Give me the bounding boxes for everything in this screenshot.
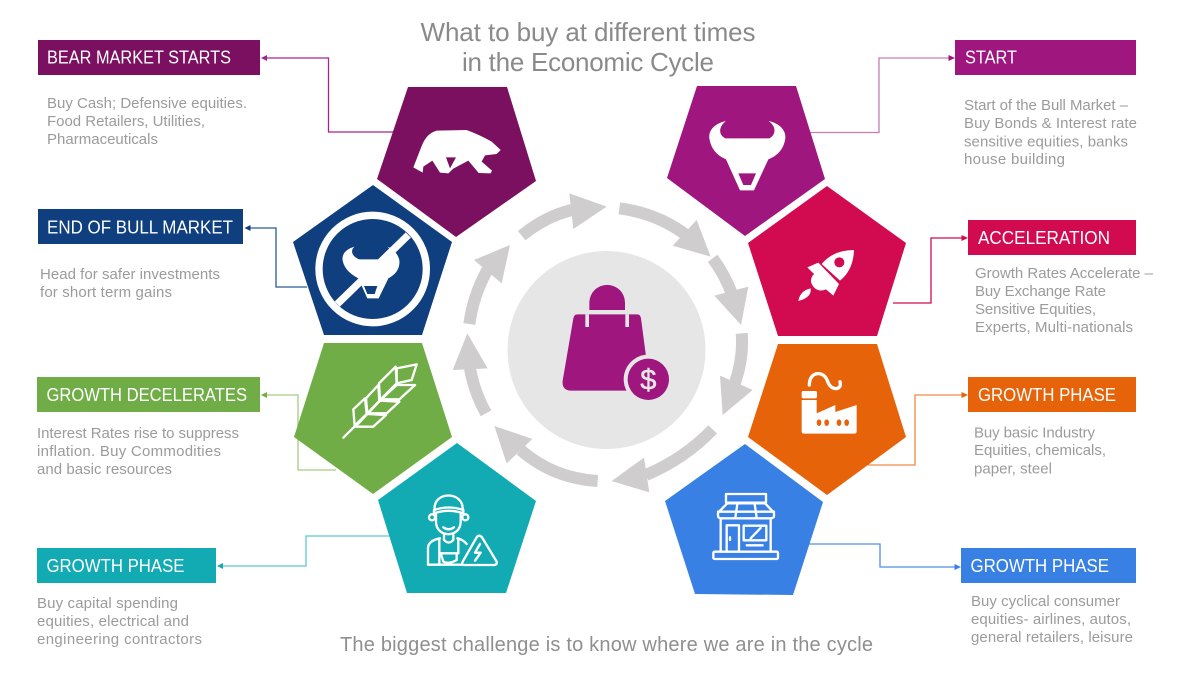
pentagon: bear market — [377, 87, 536, 237]
arrow 7 — [469, 245, 510, 324]
connector: start — [810, 55, 955, 132]
pentagon: growth decelerates — [294, 343, 452, 494]
heading — [968, 220, 1136, 255]
icon: crossed-out bull — [319, 215, 426, 323]
text block: Buy Bonds & Interest rate — [964, 115, 1137, 132]
heading: GROWTH PHASE — [978, 385, 1116, 405]
text block: Buy capital spending — [37, 595, 178, 612]
text block: Start of the Bull Market – — [964, 97, 1129, 114]
icon: store — [713, 494, 778, 559]
panel: growth phase teal — [37, 548, 216, 648]
text block: Head for safer investments — [40, 266, 220, 283]
connector: end of bull market — [244, 225, 307, 287]
text block — [40, 266, 220, 301]
text block: Growth Rates Accelerate – — [975, 265, 1154, 282]
heading: START — [965, 48, 1017, 68]
heading: GROWTH PHASE — [970, 556, 1109, 576]
title: What to buy at different times — [420, 17, 756, 47]
arrow 8 — [522, 193, 607, 236]
icon: shopping bag — [563, 285, 673, 404]
arrow 6 — [453, 333, 488, 413]
arrow 3 — [720, 333, 753, 415]
icon: factory — [802, 374, 857, 434]
pentagon: growth phase teal — [378, 443, 536, 593]
text block: for short term gains — [40, 284, 172, 301]
text block — [971, 593, 1133, 646]
text block — [975, 265, 1154, 336]
arrow 2 — [713, 258, 748, 325]
arrow 5 — [494, 426, 598, 481]
heading — [961, 548, 1136, 583]
connector: acceleration — [893, 235, 968, 303]
text block: general retailers, leisure — [971, 629, 1133, 646]
heading: END OF BULL MARKET — [47, 218, 233, 238]
arrow 1 — [619, 208, 711, 257]
arrow 4 — [612, 429, 713, 492]
text block: Buy cyclical consumer — [971, 593, 1120, 610]
panel: growth phase orange — [968, 377, 1136, 478]
text block: Food Retailers, Utilities, — [47, 113, 205, 130]
heading: ACCELERATION — [978, 228, 1110, 248]
icon: bull — [709, 121, 785, 190]
text block: Pharmaceuticals — [47, 131, 158, 148]
heading — [968, 377, 1136, 412]
icon: dollar sign: $ — [640, 364, 656, 396]
text block: inflation. Buy Commodities — [37, 443, 221, 460]
text block: Experts, Multi-nationals — [975, 319, 1133, 336]
connector: growth decelerates — [261, 392, 336, 470]
text block: paper, steel — [974, 460, 1052, 478]
pentagon: end of bull market — [293, 185, 452, 335]
panel: start — [955, 40, 1137, 168]
heading: GROWTH DECELERATES — [46, 385, 247, 405]
panel: bear market starts — [38, 40, 260, 148]
panel: acceleration — [968, 220, 1154, 336]
text block: and basic resources — [37, 461, 172, 478]
icon: bear — [413, 130, 501, 173]
text block: sensitive equities, banks — [964, 134, 1128, 150]
pentagon: growth phase orange — [748, 344, 906, 495]
pentagon: start — [667, 86, 825, 236]
text block — [47, 95, 247, 148]
text block: equities- airlines, autos, — [971, 611, 1131, 628]
heading: GROWTH PHASE — [46, 556, 184, 576]
text block: Equities, chemicals, — [974, 442, 1106, 459]
pentagon: acceleration — [748, 186, 906, 336]
text block: Buy basic Industry — [974, 424, 1096, 442]
icon: worker with warning sign — [428, 495, 497, 565]
text block: engineering contractors — [37, 631, 202, 648]
cycle arrows — [453, 193, 753, 492]
heading: BEAR MARKET STARTS — [47, 48, 231, 68]
text block — [37, 595, 202, 648]
text block — [974, 424, 1106, 478]
title: in the Economic Cycle — [462, 47, 714, 77]
heading — [955, 40, 1136, 75]
heading — [38, 40, 260, 75]
heading — [38, 209, 243, 244]
footer caption: The biggest challenge is to know where we are in the cycle — [340, 634, 873, 656]
text block: Sensitive Equities, — [975, 301, 1096, 318]
text block: Interest Rates rise to suppress — [37, 425, 239, 442]
text block: house building — [964, 151, 1065, 168]
panel: growth phase blue — [961, 548, 1136, 646]
text block: Buy Exchange Rate — [975, 283, 1106, 300]
panel: end of bull market — [38, 209, 243, 301]
pentagon: growth phase blue — [665, 444, 823, 595]
text block: equities, electrical and — [37, 613, 189, 630]
connector: bear market starts — [261, 55, 397, 132]
connector: growth phase orange — [868, 392, 968, 465]
text block — [37, 425, 239, 478]
heading — [37, 548, 216, 583]
connector: growth phase teal — [217, 536, 389, 569]
panel: growth decelerates — [37, 377, 260, 478]
icon: wheat — [343, 364, 417, 438]
text block: Buy Cash; Defensive equities. — [47, 95, 247, 112]
heading — [37, 377, 260, 412]
text block — [964, 97, 1137, 168]
connector: growth phase blue — [809, 544, 961, 570]
title — [420, 17, 756, 77]
center circle with shopping bag — [508, 251, 706, 449]
icon: rocket — [798, 250, 854, 301]
